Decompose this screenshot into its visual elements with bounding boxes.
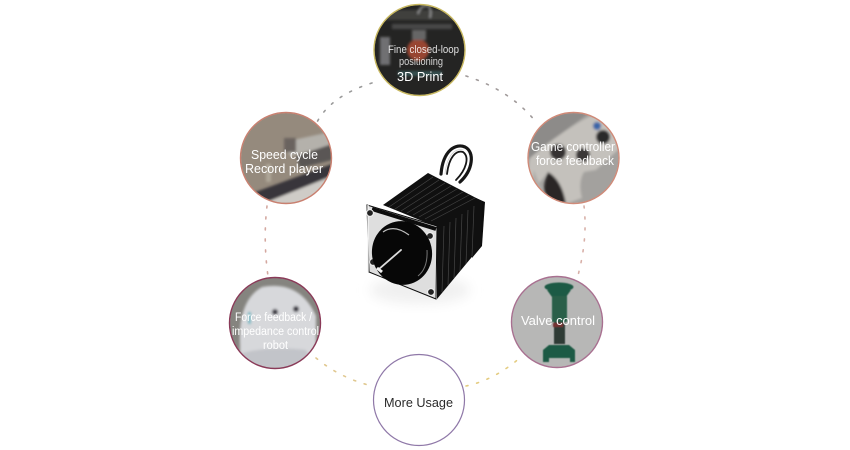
motor front plate [367, 205, 437, 299]
caption: game controller: Game controller [531, 140, 615, 154]
circle: record player [240, 112, 332, 204]
motor body [383, 173, 482, 299]
motor mounting holes [367, 210, 434, 295]
motor shaft [379, 250, 401, 269]
circle: 3D print [373, 4, 466, 96]
icon: green valve [543, 282, 575, 362]
caption: robot: robot [263, 340, 289, 352]
motor [366, 146, 485, 304]
caption: game controller: force feedback [536, 154, 615, 168]
label: more usage: More Usage [384, 395, 453, 410]
circle: valve [510, 276, 604, 370]
caption: game controller [531, 140, 615, 168]
caption: robot: Force feedback / [235, 312, 313, 324]
caption: robot: impedance control [232, 326, 319, 338]
circle outline [230, 278, 320, 368]
circle: robot [228, 277, 322, 372]
circle outline [528, 112, 619, 204]
caption: 3D print: 3D Print [397, 69, 443, 84]
caption: record player: Speed cycle [251, 147, 318, 162]
caption: 3D print: Fine closed-loop [388, 44, 459, 56]
circle outline [512, 276, 602, 368]
caption: record player: Record player [245, 161, 324, 176]
caption: 3D print: positioning [399, 56, 443, 68]
caption: record player [245, 147, 324, 176]
caption: 3D print [388, 44, 459, 84]
dashed orbit ring [265, 76, 585, 386]
circle: game controller [528, 112, 620, 204]
circle: more usage [374, 354, 464, 446]
circle outline [240, 112, 332, 204]
circle outline [374, 4, 465, 96]
motor face [366, 215, 438, 291]
caption: robot [232, 312, 319, 352]
motor fins [389, 177, 475, 292]
caption: valve: Valve control [521, 313, 595, 328]
motor wires [441, 146, 471, 182]
motor rear cap [472, 198, 485, 258]
motor shadow [370, 276, 470, 304]
